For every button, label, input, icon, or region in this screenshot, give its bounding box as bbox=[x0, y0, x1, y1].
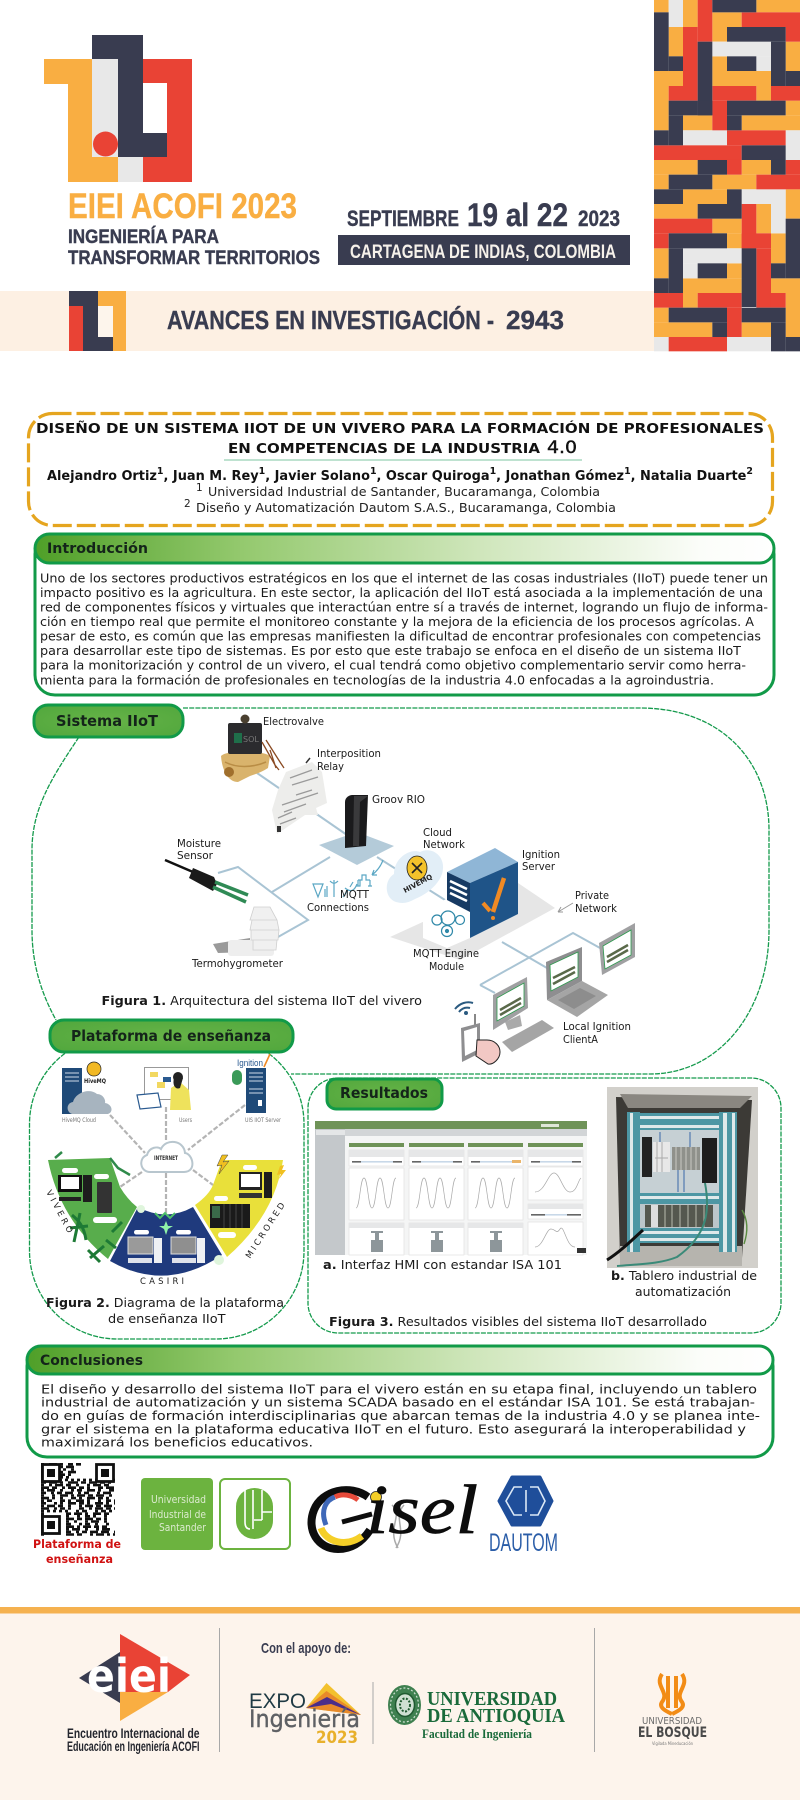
diagram labels: Termohygrometer bbox=[191, 958, 284, 970]
event header bbox=[0, 0, 800, 351]
diagram labels: Local Ignition bbox=[563, 1021, 631, 1033]
chart: hmi screenshot bbox=[315, 1121, 587, 1255]
diagram labels: Module bbox=[429, 961, 464, 973]
wedge: casiri bbox=[110, 1205, 224, 1276]
diagram labels: Moisture bbox=[177, 838, 221, 850]
event dates: 19 al 22 bbox=[467, 197, 568, 233]
icon: users bbox=[137, 1068, 192, 1124]
wedge: microrred bbox=[195, 1155, 286, 1257]
architecture diagram bbox=[165, 714, 635, 1064]
icon: hivemq cloud: HIVEMQ bbox=[402, 873, 434, 895]
heading: sistema bbox=[34, 705, 183, 737]
intro text: ción en tiempo real que permite el monitoreo constante y la mejora de la eficiencia de los procesos agrícolas. A bbox=[40, 615, 755, 629]
intro text: mienta para la formación de profesionales en tecnologías de la industria 4.0 enfocadas a la agroindustria. bbox=[40, 673, 714, 687]
intro text bbox=[40, 571, 768, 687]
authors: 1 bbox=[370, 466, 377, 477]
affiliations: 2 bbox=[184, 498, 191, 510]
qr code bbox=[33, 1464, 121, 1566]
diagram labels: MQTT Engine bbox=[413, 948, 479, 960]
intro text: Uno de los sectores productivos estratégicos en los que el internet de las cosas industriales (IIoT) puede tener un bbox=[40, 571, 768, 585]
authors: 2 bbox=[746, 466, 753, 477]
icon: ignition server bbox=[232, 1054, 281, 1124]
event dates: SEPTIEMBRE bbox=[347, 206, 459, 231]
icon: groov rio bbox=[345, 795, 368, 848]
icon: desktop bbox=[493, 977, 554, 1052]
diagram labels: Electrovalve bbox=[263, 716, 324, 728]
icon: laptop bbox=[546, 947, 608, 1017]
authors: Alejandro Ortiz bbox=[47, 469, 158, 484]
caption a: a. Interfaz HMI con estandar ISA 101 bbox=[323, 1257, 562, 1272]
diagram labels: Sensor bbox=[177, 850, 214, 862]
mosaic pattern bbox=[654, 0, 800, 351]
event name: EIEI ACOFI 2023 bbox=[68, 187, 297, 226]
logo: eiei: eiei bbox=[87, 1649, 171, 1703]
sine plots bbox=[356, 1173, 581, 1247]
paper title bbox=[36, 421, 764, 457]
icon: hivemq server: HiveMQ bbox=[84, 1077, 106, 1085]
figure 2 caption bbox=[46, 1295, 284, 1326]
figure 2 caption: Figura 2. Diagrama de la plataforma bbox=[46, 1295, 284, 1310]
icon: interposition relay bbox=[272, 758, 327, 834]
photo: automation cabinet bbox=[607, 1087, 758, 1268]
logo: expo ingeniería: 2023 bbox=[316, 1728, 358, 1748]
support label: Con el apoyo de: bbox=[261, 1640, 351, 1657]
conclusions text: maximizará los beneficios educativos. bbox=[41, 1434, 313, 1450]
affiliations: Universidad Industrial de Santander, Bucaramanga, Colombia bbox=[208, 484, 600, 499]
authors: , Natalia Duarte bbox=[631, 469, 747, 484]
affiliations: Diseño y Automatización Dautom S.A.S., Bucaramanga, Colombia bbox=[196, 500, 616, 515]
logo: el bosque: EL BOSQUE bbox=[638, 1725, 707, 1741]
heading: Introducción bbox=[47, 541, 148, 557]
logo: universidad de antioquia: DE ANTIOQUIA bbox=[427, 1705, 566, 1727]
authors: , Javier Solano bbox=[265, 469, 370, 484]
logo: eiei bbox=[67, 1634, 200, 1754]
small logo bbox=[69, 291, 126, 351]
icon: tablet and hand bbox=[461, 1014, 500, 1064]
dashed links bbox=[110, 1105, 245, 1213]
logo: universidad de antioquia: UNIVERSIDAD bbox=[427, 1688, 557, 1710]
diagram labels: Interposition bbox=[317, 748, 381, 760]
conclusions text bbox=[41, 1381, 760, 1450]
caption b bbox=[611, 1268, 757, 1299]
conclusions text: do en guías de formación interdisciplinarias que abarcan temas de la industria 4.0 y se planea inte- bbox=[41, 1408, 760, 1423]
panel: introducción bbox=[35, 534, 774, 695]
logo: expo ingeniería bbox=[249, 1683, 361, 1748]
panel: resultados bbox=[308, 1078, 781, 1333]
event location bbox=[338, 235, 630, 265]
authors: , Jonathan Gómez bbox=[496, 469, 624, 484]
icon: ignition server: UIS IIOT Server bbox=[245, 1117, 281, 1124]
network diamond bbox=[319, 832, 394, 865]
intro text: impacto positivo es la agricultura. En este sector, la aplicación del IIoT está asociada a la implementación de una bbox=[40, 586, 763, 600]
band title: AVANCES EN INVESTIGACIÓN - bbox=[167, 305, 494, 335]
icon: users: Users bbox=[179, 1117, 192, 1124]
logo: expo ingeniería: Ingeniería bbox=[249, 1705, 360, 1733]
event dates bbox=[347, 197, 620, 233]
logo: el bosque: UNIVERSIDAD bbox=[642, 1716, 702, 1727]
heading: plataforma: Plataforma de enseñanza bbox=[71, 1027, 271, 1045]
conclusions text: industrial de automatización y un sistema SCADA basado en el estándar ISA 101. Se está trabajan- bbox=[41, 1394, 755, 1410]
icons: mqtt connections bbox=[313, 860, 383, 897]
authors: , Oscar Quiroga bbox=[377, 469, 490, 484]
heading: Conclusiones bbox=[40, 1353, 143, 1369]
footer bbox=[0, 1607, 800, 1800]
caption b: b. Tablero industrial de bbox=[611, 1268, 757, 1283]
intro text: pesar de esto, es común que las empresas manifiesten la dificultad de encontrar profesionales con competencias bbox=[40, 629, 761, 643]
icon: electrovalve bbox=[221, 714, 284, 782]
connection lines bbox=[218, 773, 445, 937]
logo: gisel: isel bbox=[366, 1472, 478, 1549]
diagram labels: Cloud bbox=[423, 827, 452, 839]
wedge: vivero bbox=[48, 1152, 137, 1262]
wedge labels: CASIRI bbox=[140, 1277, 187, 1287]
diagram labels: Network bbox=[575, 903, 618, 915]
icon: electrovalve: SOL bbox=[243, 735, 259, 744]
authors: , Juan M. Rey bbox=[164, 469, 259, 484]
conclusions text: El diseño y desarrollo del sistema IIoT para el vivero están en su etapa final, incluyendo un tablero bbox=[41, 1381, 757, 1396]
intro text: red de componentes físicos y virtuales que interactúan entre sí a través de internet, logrando un flujo de informa- bbox=[40, 600, 768, 614]
diagram labels: Private bbox=[575, 890, 609, 902]
diagram labels: MQTT bbox=[340, 889, 370, 901]
qr caption bbox=[33, 1537, 121, 1566]
logo: dautom bbox=[489, 1477, 558, 1557]
diagram labels: Groov RIO bbox=[372, 794, 425, 806]
diagram labels: Ignition bbox=[522, 849, 560, 861]
heading: plataforma bbox=[50, 1020, 293, 1052]
figure 1 caption: Figura 1. Arquitectura del sistema IIoT del vivero bbox=[102, 993, 422, 1008]
qr caption: Plataforma de bbox=[33, 1537, 121, 1551]
icon: internet cloud: INTERNET bbox=[154, 1154, 178, 1162]
figure 3 caption: Figura 3. Resultados visibles del sistema IIoT desarrollado bbox=[329, 1314, 707, 1329]
icon: ignition server bbox=[390, 848, 555, 960]
intro text: para la monitorización y control de un vivero, el cual tendrá como objetivo complementario servir como herra- bbox=[40, 659, 746, 673]
event slogan: TRANSFORMAR TERRITORIOS bbox=[68, 247, 320, 269]
icon: hivemq server bbox=[62, 1062, 112, 1124]
logo: el bosque bbox=[638, 1674, 707, 1746]
logo: el bosque: Vigilada Mineducación bbox=[652, 1741, 693, 1746]
wedge labels: VIVERO bbox=[43, 1189, 76, 1238]
diagram labels: Server bbox=[522, 861, 556, 873]
logo: universidad de antioquia: Facultad de Ingeniería bbox=[422, 1727, 533, 1741]
figure 2 caption: de enseñanza IIoT bbox=[108, 1311, 226, 1326]
heading: resultados bbox=[327, 1079, 442, 1109]
paper title: DISEÑO DE UN SISTEMA IIOT DE UN VIVERO PARA LA FORMACIÓN DE PROFESIONALES bbox=[36, 421, 764, 437]
logo: expo ingeniería: EXPO bbox=[249, 1690, 306, 1713]
logo: gisel bbox=[311, 1472, 478, 1549]
event dates: 2023 bbox=[578, 206, 620, 231]
paper number: 2943 bbox=[506, 305, 564, 335]
icon: moisture sensor bbox=[165, 860, 248, 902]
logo: universidad industrial de santander: Santander bbox=[159, 1522, 207, 1534]
paper title panel bbox=[28, 414, 772, 526]
qr caption: enseñanza bbox=[46, 1552, 113, 1566]
paper title: 4.0 bbox=[547, 438, 577, 457]
event location: CARTAGENA DE INDIAS, COLOMBIA bbox=[350, 242, 616, 263]
affiliations bbox=[184, 482, 616, 515]
authors: 1 bbox=[259, 466, 265, 477]
panel: sistema IIoT bbox=[32, 705, 769, 1074]
authors: 1 bbox=[624, 466, 631, 477]
heading: sistema: Sistema IIoT bbox=[56, 712, 159, 730]
diagram labels: Connections bbox=[307, 902, 369, 914]
icon: monitor bbox=[599, 923, 635, 975]
panel: conclusiones bbox=[27, 1346, 773, 1457]
logo: eiei: Encuentro Internacional de bbox=[67, 1725, 200, 1741]
logo: universidad industrial de santander: Industrial de bbox=[149, 1509, 206, 1521]
icon: hivemq server: HiveMQ Cloud bbox=[62, 1117, 96, 1124]
event slogan: INGENIERÍA PARA bbox=[68, 225, 219, 248]
heading: resultados: Resultados bbox=[340, 1084, 428, 1102]
wedge labels bbox=[43, 1189, 289, 1287]
arrow: private network bbox=[558, 903, 573, 912]
logo: universidad de antioquia bbox=[388, 1685, 566, 1741]
diagram labels: ClientA bbox=[563, 1034, 599, 1046]
platform diagram bbox=[43, 1054, 289, 1287]
logo: eiei: Educación en Ingeniería ACOFI bbox=[67, 1738, 200, 1754]
intro text: para desarrollar este tipo de sistemas. Es por esto que este trabajo se enfoca en el diseño de un sistema IIoT bbox=[40, 644, 742, 658]
logo: universidad industrial de santander bbox=[141, 1478, 290, 1550]
authors: 1 bbox=[157, 466, 164, 477]
panel: plataforma de enseñanza bbox=[30, 1020, 304, 1339]
affiliations: 1 bbox=[196, 482, 203, 494]
client lines bbox=[480, 933, 600, 993]
section band bbox=[0, 291, 654, 351]
wedge labels: MICRORED bbox=[244, 1199, 289, 1261]
icon: wifi bbox=[455, 1002, 473, 1014]
logo: dautom: DAUTOM bbox=[489, 1529, 558, 1557]
diagram labels bbox=[177, 716, 631, 1046]
diagram labels: Network bbox=[423, 839, 466, 851]
caption b: automatización bbox=[635, 1284, 731, 1299]
paper title: EN COMPETENCIAS DE LA INDUSTRIA bbox=[228, 442, 540, 457]
icon: hivemq cloud bbox=[387, 850, 443, 903]
icon: internet cloud bbox=[141, 1142, 192, 1172]
diagram labels: Relay bbox=[317, 761, 344, 773]
logo: universidad industrial de santander: Universidad bbox=[151, 1494, 206, 1506]
icon: ignition server: Ignition bbox=[237, 1058, 263, 1069]
valves bbox=[371, 1231, 502, 1252]
conclusions text: grar el sistema en la plataforma educativa IIoT en el futuro. Esto asegurará la interoperabilidad y bbox=[41, 1421, 747, 1436]
icon: termohygrometer bbox=[213, 907, 279, 956]
event slogan bbox=[68, 225, 320, 269]
event logo bbox=[44, 35, 192, 182]
authors: 1 bbox=[490, 466, 496, 477]
